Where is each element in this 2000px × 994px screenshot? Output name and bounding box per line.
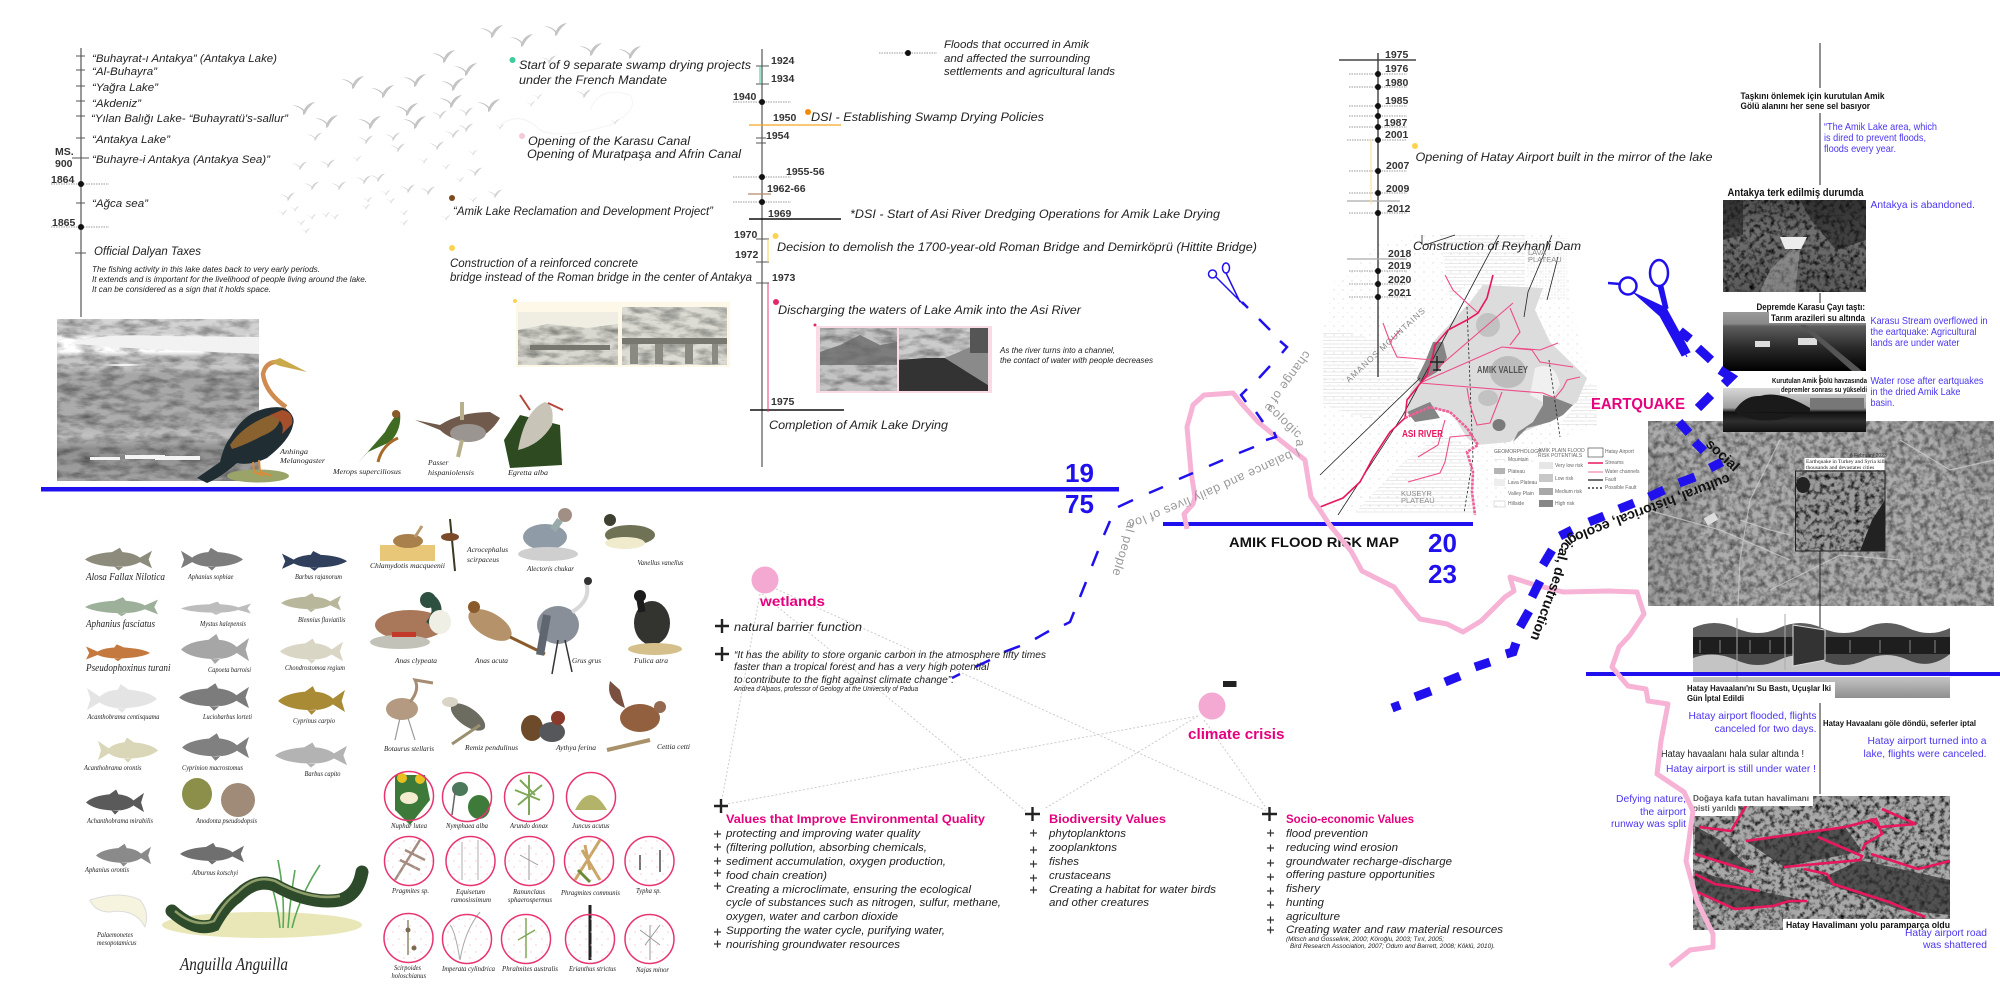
bird labels: Cettia cetti xyxy=(657,742,690,751)
airport flood captions: Hatay airport turned into a xyxy=(1868,735,1987,747)
panel: values improving environmental quality: Supporting the water cycle, purifying water, xyxy=(726,925,945,937)
year labels: MS. xyxy=(55,146,74,158)
panel: socio-economic values: groundwater recharge-discharge xyxy=(1286,856,1452,868)
panel: values improving environmental quality: sediment accumulation, oxygen production, xyxy=(726,856,946,868)
map divider and title: AMIK FLOOD RISK MAP xyxy=(1229,535,1399,550)
photo: shattered airport runway with pink cracks: Doğaya kafa tutan havalimanı xyxy=(1693,794,1809,803)
legend: floods marker: settlements and agricultural lands xyxy=(944,66,1116,78)
map legend: AMIK PLAIN FLOOD xyxy=(1538,448,1585,454)
bird labels: Aythya ferina xyxy=(555,743,596,752)
panel: wetland plant species xyxy=(384,772,674,980)
panel: climate crisis: climate crisis xyxy=(1188,726,1284,743)
panel: biodiversity values: fishes xyxy=(1049,856,1080,868)
photo: Karasu stream overflow: the eartquake: Agricultural xyxy=(1870,326,1976,338)
map legend: Hillside xyxy=(1508,501,1524,507)
event labels: Decision to demolish the 1700-year-old Roman Bridge and Demirköprü (Hittite Bridge) xyxy=(777,240,1257,254)
airport flood captions: runway was split xyxy=(1611,818,1686,830)
photo: Antakya abandoned: Antakya is abandoned. xyxy=(1870,199,1975,211)
divider: right horizontal line xyxy=(1586,672,2000,676)
plant labels: Typha sp. xyxy=(636,886,661,895)
panel: socio-economic values: flood prevention xyxy=(1286,828,1368,840)
curved label: change of ecological balance: change of ecological balance and daily lives of local people xyxy=(1113,352,1309,575)
year labels: 1954 xyxy=(766,130,790,142)
panel: wetlands: natural barrier function xyxy=(734,620,862,634)
year labels: 1950 xyxy=(773,112,797,124)
bird labels: scirpaceus xyxy=(467,555,499,564)
bird: Anhinga melanogaster: Anhinga xyxy=(279,447,308,456)
panel: wetlands: wetlands xyxy=(759,593,825,609)
photo: shattered airport runway with pink cracks xyxy=(1693,794,1987,951)
plant labels: Phralmites australis xyxy=(501,964,558,973)
fish labels: Aphanius orontis xyxy=(84,865,129,874)
bird labels: Anas acuta xyxy=(474,656,508,665)
panel: values improving environmental quality: nourishing groundwater resources xyxy=(726,939,901,951)
year labels: 2021 xyxy=(1388,287,1412,299)
fish labels: Palaemonetes xyxy=(96,930,133,939)
fish labels: Blennius fluviatilis xyxy=(298,615,346,624)
event labels: Opening of Hatay Airport built in the mirror of the lake xyxy=(1416,150,1713,164)
bird: Egretta alba: Egretta alba xyxy=(507,468,548,477)
event labels: Construction of Reyhanli Dam xyxy=(1413,239,1581,253)
photo: shattered airport runway with pink cracks: Hatay airport road xyxy=(1905,927,1987,939)
panel: biodiversity values: and other creatures xyxy=(1049,897,1150,909)
fish labels: Barbus rajanorum xyxy=(295,572,342,581)
airport flood captions: Hatay airport is still under water ! xyxy=(1666,763,1816,775)
caption: Amik lake floods every year: Taşkını önlemek için kurutulan Amik xyxy=(1740,91,1885,102)
arrow: thick blue dashed line, earthquake destruction xyxy=(1392,331,1731,708)
map divider and title: 23 xyxy=(1428,559,1457,589)
plant labels: Ranunclaus xyxy=(512,887,545,896)
bird: Anhinga melanogaster: Melanogaster xyxy=(279,456,325,465)
plant labels: Erianthus strictus xyxy=(568,964,616,973)
year labels: 1969 xyxy=(768,208,792,220)
panel: values improving environmental quality: (filtering pollution, absorbing chemicals, xyxy=(726,842,927,854)
lake names list: “Akdeniz” xyxy=(92,98,142,110)
photo: Karasu stream overflow: lands are under water xyxy=(1870,337,1960,349)
map legend: Plateau xyxy=(1508,469,1525,475)
panel: wetland bird species xyxy=(370,508,690,753)
bird labels: Anas clypeata xyxy=(394,656,437,665)
pink river line xyxy=(1184,393,1713,966)
inset: earthquake news map: thousands and devastates cities xyxy=(1806,465,1874,471)
panel: socio-economic values: offering pasture opportunities xyxy=(1286,869,1436,881)
plant labels: Equisetum xyxy=(455,887,486,896)
fish labels: Alosa Fallax Nilotica xyxy=(85,572,165,583)
panel: biodiversity values xyxy=(1025,807,1217,909)
photo: water rose in lake basin xyxy=(1723,375,1984,432)
bird: Merops superciliosus: Merops superciliosus xyxy=(332,467,401,476)
panel: biodiversity values: phytoplanktons xyxy=(1048,828,1127,840)
dalyan taxes note: It can be considered as a sign that it holds space. xyxy=(92,284,271,294)
lake names list: “Antakya Lake” xyxy=(92,134,171,146)
bird labels xyxy=(370,545,690,753)
satellite image xyxy=(1648,421,1994,627)
year labels: 1970 xyxy=(734,229,758,241)
year labels: 2020 xyxy=(1388,274,1412,286)
bird labels: Remiz pendulinus xyxy=(464,743,518,752)
year labels: 2001 xyxy=(1385,129,1409,141)
year labels: 1940 xyxy=(733,91,757,103)
photo: Karasu stream overflow: Depremde Karasu Çayı taştı: xyxy=(1756,302,1865,313)
panel: biodiversity values: crustaceans xyxy=(1049,870,1112,882)
airport flood captions: Gün İptal Edildi xyxy=(1687,693,1744,703)
panel: fish species xyxy=(83,548,362,974)
plant labels: Imperata cylindrica xyxy=(441,964,495,973)
panel: climate crisis xyxy=(1188,681,1284,743)
bird: Passer hispaniolensis: Passer xyxy=(427,458,448,467)
panel: biodiversity values: Biodiversity Values xyxy=(1049,812,1166,826)
plant labels: Nuphar lutea xyxy=(390,821,427,830)
panel: wetlands xyxy=(715,566,1046,693)
map legend: High risk xyxy=(1555,501,1575,507)
photos: river turning into channel xyxy=(814,324,1153,393)
legend: floods marker: and affected the surrounding xyxy=(944,53,1091,65)
map labels: PLATEAU xyxy=(1401,496,1435,505)
plant labels xyxy=(390,821,669,980)
year labels: 1985 xyxy=(1385,95,1409,107)
flock of birds xyxy=(278,23,641,234)
year labels: 1973 xyxy=(772,272,796,284)
event labels xyxy=(769,109,1257,432)
plant labels: Arundo donax xyxy=(509,821,549,830)
curved label: social, cultural, historical, ecological, destruction: cultural, historical, ecological, destruction xyxy=(1530,475,1730,640)
panel: values improving environmental quality xyxy=(714,799,1001,951)
panel: wetlands: “It has the ability to store organic carbon in the atmosphere fifty times xyxy=(734,650,1046,661)
bird: Anhinga melanogaster xyxy=(197,358,325,483)
fish labels: Mystus halepensis xyxy=(199,619,246,628)
panel: socio-economic values xyxy=(1262,807,1504,950)
year labels: 2007 xyxy=(1386,160,1410,172)
fish labels: Aphanius sophiae xyxy=(187,572,234,581)
panel: socio-economic values: Socio-economic Values xyxy=(1286,812,1414,826)
lake names list: “Ağca sea” xyxy=(92,198,149,210)
airport flood captions: canceled for two days. xyxy=(1714,723,1816,735)
airport flood captions: Hatay Havaalanı'nı Su Bastı, Uçuşlar İki xyxy=(1687,683,1831,693)
caption: Amik lake floods every year: “The Amik Lake area, which xyxy=(1824,121,1937,133)
fish labels: Anguilla Anguilla xyxy=(179,954,288,974)
event labels xyxy=(1412,143,1713,253)
map legend: Hatay Airport xyxy=(1605,449,1635,455)
photo: water rose in lake basin: Kurutulan Amik Gölü havzasında xyxy=(1772,376,1868,385)
fish labels: Acanthobrama centisquama xyxy=(87,712,160,721)
event labels: Discharging the waters of Lake Amik into the Asi River xyxy=(778,303,1082,317)
inset: earthquake news map: 6 February 2023 xyxy=(1850,453,1887,459)
plant labels: Nymphaea alba xyxy=(445,821,488,830)
year labels: 1924 xyxy=(771,55,795,67)
bird labels: Botaurus stellaris xyxy=(384,744,434,753)
panel: events text beside middle timeline: “Amik Lake Reclamation and Development Project” xyxy=(453,204,714,218)
bird labels: Fulica atra xyxy=(633,656,668,665)
plant labels: ramosissimum xyxy=(451,895,492,904)
plant labels: sphaerospermus xyxy=(508,895,552,904)
arrow: thin blue dashed line, change of ecological balance xyxy=(952,302,1287,678)
inset: earthquake news map: Earthquake in Turkey and Syria kills xyxy=(1806,459,1887,465)
photo: aerial view of the lake xyxy=(57,319,259,481)
panel: values improving environmental quality: food chain creation) xyxy=(726,870,827,882)
panel: socio-economic values: reducing wind erosion xyxy=(1286,842,1398,854)
caption: Amik lake floods every year: Gölü alanını her sene sel basıyor xyxy=(1740,101,1870,112)
year labels xyxy=(1384,49,1412,299)
photo stack with captions xyxy=(1723,91,1988,432)
fish labels: Capoeta barroisi xyxy=(208,665,251,674)
map legend: Mountain xyxy=(1508,457,1529,463)
caption: Amik lake floods every year: floods every year. xyxy=(1824,143,1896,155)
legend: floods marker: Floods that occurred in Amik xyxy=(944,39,1090,51)
map legend: Fault xyxy=(1605,477,1617,483)
fish labels: Achanthobrama mirabilis xyxy=(86,816,153,825)
dalyan taxes note xyxy=(92,244,367,294)
panel: values improving environmental quality: oxygen, water and carbon dioxide xyxy=(726,911,898,923)
year labels: 1975 xyxy=(771,396,795,408)
streams and water channels xyxy=(1383,275,1580,482)
panel: wetlands: Andrea d'Alpaos, professor of Geology at the University of Padua xyxy=(733,686,918,693)
year labels: 2012 xyxy=(1387,203,1411,215)
panel: events text beside middle timeline: Opening of the Karasu Canal xyxy=(528,134,690,148)
map divider and title xyxy=(1163,522,1473,589)
panel: wetlands: faster than a tropical forest and has a very high potential xyxy=(734,662,990,673)
bird labels: Chlamydotis macqueenii xyxy=(370,561,445,570)
year labels: 1980 xyxy=(1385,77,1409,89)
photo: Antakya abandoned: Antakya terk edilmiş durumda xyxy=(1728,187,1864,199)
bird labels: Acrocephalus xyxy=(466,545,508,554)
photo: panorama of flooded airport xyxy=(1693,614,1950,698)
illustration: European eel with grass xyxy=(162,860,362,938)
event labels: DSI - Establishing Swamp Drying Policies xyxy=(811,110,1044,124)
event labels: Completion of Amik Lake Drying xyxy=(769,418,948,432)
bird labels: Alectoris chukar xyxy=(526,564,574,573)
map labels: ASI RIVER xyxy=(1402,429,1444,440)
plant labels: Najas minor xyxy=(635,965,669,974)
year labels xyxy=(51,146,76,229)
year labels: 1972 xyxy=(735,249,759,261)
airport flood captions: the airport xyxy=(1640,806,1686,818)
year labels: 900 xyxy=(55,158,73,170)
fish labels: Cyprinus carpio xyxy=(293,716,335,725)
year labels: 1864 xyxy=(51,174,75,186)
panel: values improving environmental quality: Values that Improve Environmental Quality xyxy=(726,812,985,826)
panel: values improving environmental quality: Creating a microclimate, ensuring the ecological xyxy=(726,884,972,896)
inset: earthquake news map xyxy=(1796,453,1887,551)
airport flood captions: Hatay airport flooded, flights xyxy=(1688,710,1816,722)
photo: shattered airport runway with pink cracks: pisti yarıldı xyxy=(1693,804,1736,813)
photo: shattered airport runway with pink cracks: Hatay Havalimanı yolu paramparça oldu xyxy=(1786,920,1950,930)
year labels: 1962-66 xyxy=(767,183,806,195)
timeline divider 1975 xyxy=(41,458,1119,519)
panel: values improving environmental quality: protecting and improving water quality xyxy=(725,828,922,840)
map legend: Streams xyxy=(1605,460,1624,466)
curved label: social, cultural, historical, ecological, destruction: social xyxy=(1706,441,1740,472)
year labels xyxy=(733,55,825,408)
panel: wetlands: to contribute to the fight against climate change”. xyxy=(734,675,954,686)
dotted connections between concepts and values xyxy=(722,589,1267,811)
map legend: Water channels xyxy=(1605,469,1640,475)
photos: Roman bridge and concrete bridge xyxy=(513,299,730,367)
label: EARTQUAKE: EARTQUAKE xyxy=(1591,396,1685,413)
airport flood captions: Defying nature, xyxy=(1616,793,1686,805)
airport flood captions xyxy=(1611,682,1987,830)
fish labels: Chondrostomoa regium xyxy=(285,663,345,672)
panel: events text beside middle timeline: Start of 9 separate swamp drying projects xyxy=(519,58,751,72)
panel: values improving environmental quality: cycle of substances such as nitrogen, sulfur, methane, xyxy=(726,897,1001,909)
panel: socio-economic values: (Mitsch and Gosselink, 2000; Köroğlu, 2003; Tırıl, 2005; xyxy=(1286,936,1444,943)
year labels: 1955-56 xyxy=(786,166,825,178)
year labels: 2009 xyxy=(1386,183,1410,195)
panel: socio-economic values: fishery xyxy=(1286,883,1322,895)
panel: upper timeline 1975-2021 xyxy=(1339,49,1713,377)
plant circles xyxy=(384,772,674,964)
bird: Passer hispaniolensis: hispaniolensis xyxy=(428,468,474,477)
panel: events text beside middle timeline: Opening of Muratpaşa and Afrin Canal xyxy=(527,147,741,161)
lake names list: “Yılan Balığı Lake- “Buhayratü's-sallur” xyxy=(91,113,289,125)
photo: water rose in lake basin: basin. xyxy=(1870,397,1894,409)
panel: socio-economic values: agriculture xyxy=(1286,911,1340,923)
icon: large scissors xyxy=(1608,260,1690,357)
fish labels: mesopotamicus xyxy=(97,938,137,947)
map legend: Valley Plain xyxy=(1508,491,1534,497)
event labels: *DSI - Start of Asi River Dredging Operations for Amik Lake Drying xyxy=(850,207,1220,221)
fish labels: Alburnus kotschyi xyxy=(191,868,238,877)
shells xyxy=(182,778,255,817)
airport flood captions: Hatay havaalanı hala sular altında ! xyxy=(1661,749,1804,760)
map legend xyxy=(1494,448,1640,507)
timeline divider 1975: 75 xyxy=(1065,489,1094,519)
fault lines xyxy=(1320,235,1558,515)
legend: floods marker xyxy=(879,39,1116,78)
plant labels: holoschianus xyxy=(392,971,426,980)
year labels: 1975 xyxy=(1385,49,1409,61)
map labels: AMANOS MOUNTAINS xyxy=(1344,305,1428,384)
icon: small scissors xyxy=(1208,263,1244,305)
map legend: Medium risk xyxy=(1555,489,1582,495)
bird: Egretta alba xyxy=(504,395,563,477)
map divider and title: 20 xyxy=(1428,528,1457,558)
map legend: GEOMORPHOLOGY xyxy=(1494,449,1542,455)
fish illustrations xyxy=(85,548,347,867)
year labels: 1987 xyxy=(1384,117,1408,129)
dalyan taxes note: Official Dalyan Taxes xyxy=(94,244,201,258)
bird: Passer hispaniolensis xyxy=(415,402,500,477)
timeline divider 1975: 19 xyxy=(1065,458,1094,488)
panel: events text beside middle timeline: Construction of a reinforced concrete xyxy=(450,256,638,270)
photo: water rose in lake basin: in the dried Amik Lake xyxy=(1870,386,1961,398)
panel: socio-economic values: Bird Research Association, 2007; Odum and Barrett, 2008; Köklü, 2010). xyxy=(1290,943,1495,950)
bird: Merops superciliosus xyxy=(332,410,401,476)
map labels: LAVA xyxy=(1528,248,1546,257)
photo: water rose in lake basin: depremler sonrası su yükseldi xyxy=(1781,385,1867,394)
fish labels: Pseudophoxinus turani xyxy=(85,663,171,674)
lake names list xyxy=(91,53,289,210)
plant labels: Scirpoides xyxy=(394,963,421,972)
photos: river turning into channel: the contact of water with people decreases xyxy=(1000,356,1153,365)
bird illustrations xyxy=(370,508,682,750)
panel: biodiversity values: zooplanktons xyxy=(1048,842,1118,854)
fish labels: Acanthobrama orontis xyxy=(83,763,142,772)
dalyan taxes note: The fishing activity in this lake dates back to very early periods. xyxy=(92,264,320,274)
fish labels: Aphanius fasciatus xyxy=(85,619,155,630)
lake names list: “Buhayre-i Antakya (Antakya Sea)” xyxy=(92,154,271,166)
panel: events text beside middle timeline: under the French Mandate xyxy=(519,73,667,87)
year labels: 1865 xyxy=(52,217,76,229)
panel: Amik flood risk map xyxy=(1320,235,1640,515)
fish labels: Barbus capito xyxy=(304,769,341,778)
plant labels: Phragmites communis xyxy=(560,888,620,897)
shrimp xyxy=(90,895,147,927)
photo: Antakya abandoned xyxy=(1723,187,1975,292)
plant labels: Juncus acutus xyxy=(572,821,610,830)
photo: Karasu stream overflow xyxy=(1723,302,1988,371)
map labels xyxy=(1344,248,1562,505)
panel: events text beside middle timeline xyxy=(449,57,752,284)
bird labels: Vanellus vanellus xyxy=(638,558,684,567)
bird labels: Grus grus xyxy=(572,656,601,665)
lake names list: “Al-Buhayra” xyxy=(92,66,158,78)
map legend: RISK POTENTIALS xyxy=(1538,453,1583,459)
caption: Amik lake floods every year xyxy=(1740,91,1937,155)
panel: events text beside middle timeline: bridge instead of the Roman bridge in the center of Antakya xyxy=(450,270,752,284)
dalyan taxes note: It extends and is important for the livelihood of people living around the lake. xyxy=(92,274,367,284)
year labels: 1934 xyxy=(771,73,795,85)
fish labels: Cyprinion macrostomus xyxy=(182,763,243,772)
panel: socio-economic values: hunting xyxy=(1286,897,1325,909)
panel: biodiversity values: Creating a habitat for water birds xyxy=(1049,884,1217,896)
right column vertical line xyxy=(1819,43,1821,794)
plant labels: Pragmites sp. xyxy=(391,886,429,895)
lake names list: “Buhayrat-ı Antakya” (Antakya Lake) xyxy=(92,53,277,65)
photos: river turning into channel: As the river turns into a channel, xyxy=(999,346,1115,355)
icon: airport xyxy=(1430,356,1444,371)
year labels: 2018 xyxy=(1388,248,1412,260)
map labels: KUSEYR xyxy=(1401,489,1432,498)
map legend: Low risk xyxy=(1555,476,1574,482)
year labels: 1976 xyxy=(1385,63,1409,75)
map labels: AMIK VALLEY xyxy=(1477,365,1528,376)
fish labels: Anodonta pseudodopsis xyxy=(195,816,257,825)
map labels: PLATEAU xyxy=(1528,255,1562,264)
map legend: Lava Plateau xyxy=(1508,480,1537,486)
photo: Karasu stream overflow: Tarım arazileri su altında xyxy=(1771,313,1866,324)
airport flood captions: lake, flights were canceled. xyxy=(1864,748,1986,760)
panel: socio-economic values: Creating water and raw material resources xyxy=(1286,924,1504,936)
fish labels xyxy=(83,572,346,974)
airport flood captions: Hatay Havaalanı göle döndü, seferler iptal xyxy=(1823,718,1976,728)
map legend: Very low risk xyxy=(1555,463,1584,469)
photo: water rose in lake basin: Water rose after eartquakes xyxy=(1870,375,1984,387)
fish labels: Luciobarbus lorteti xyxy=(202,712,252,721)
map legend: Possible Fault xyxy=(1605,485,1637,491)
photo: shattered airport runway with pink cracks: was shattered xyxy=(1922,939,1987,951)
caption: Amik lake floods every year: is dired to prevent floods, xyxy=(1824,132,1926,144)
panel: historical lake names timeline xyxy=(51,48,367,317)
panel: middle timeline 1924-1975 xyxy=(733,49,1257,467)
lake names list: “Yağra Lake” xyxy=(92,82,159,94)
year labels: 2019 xyxy=(1388,260,1412,272)
